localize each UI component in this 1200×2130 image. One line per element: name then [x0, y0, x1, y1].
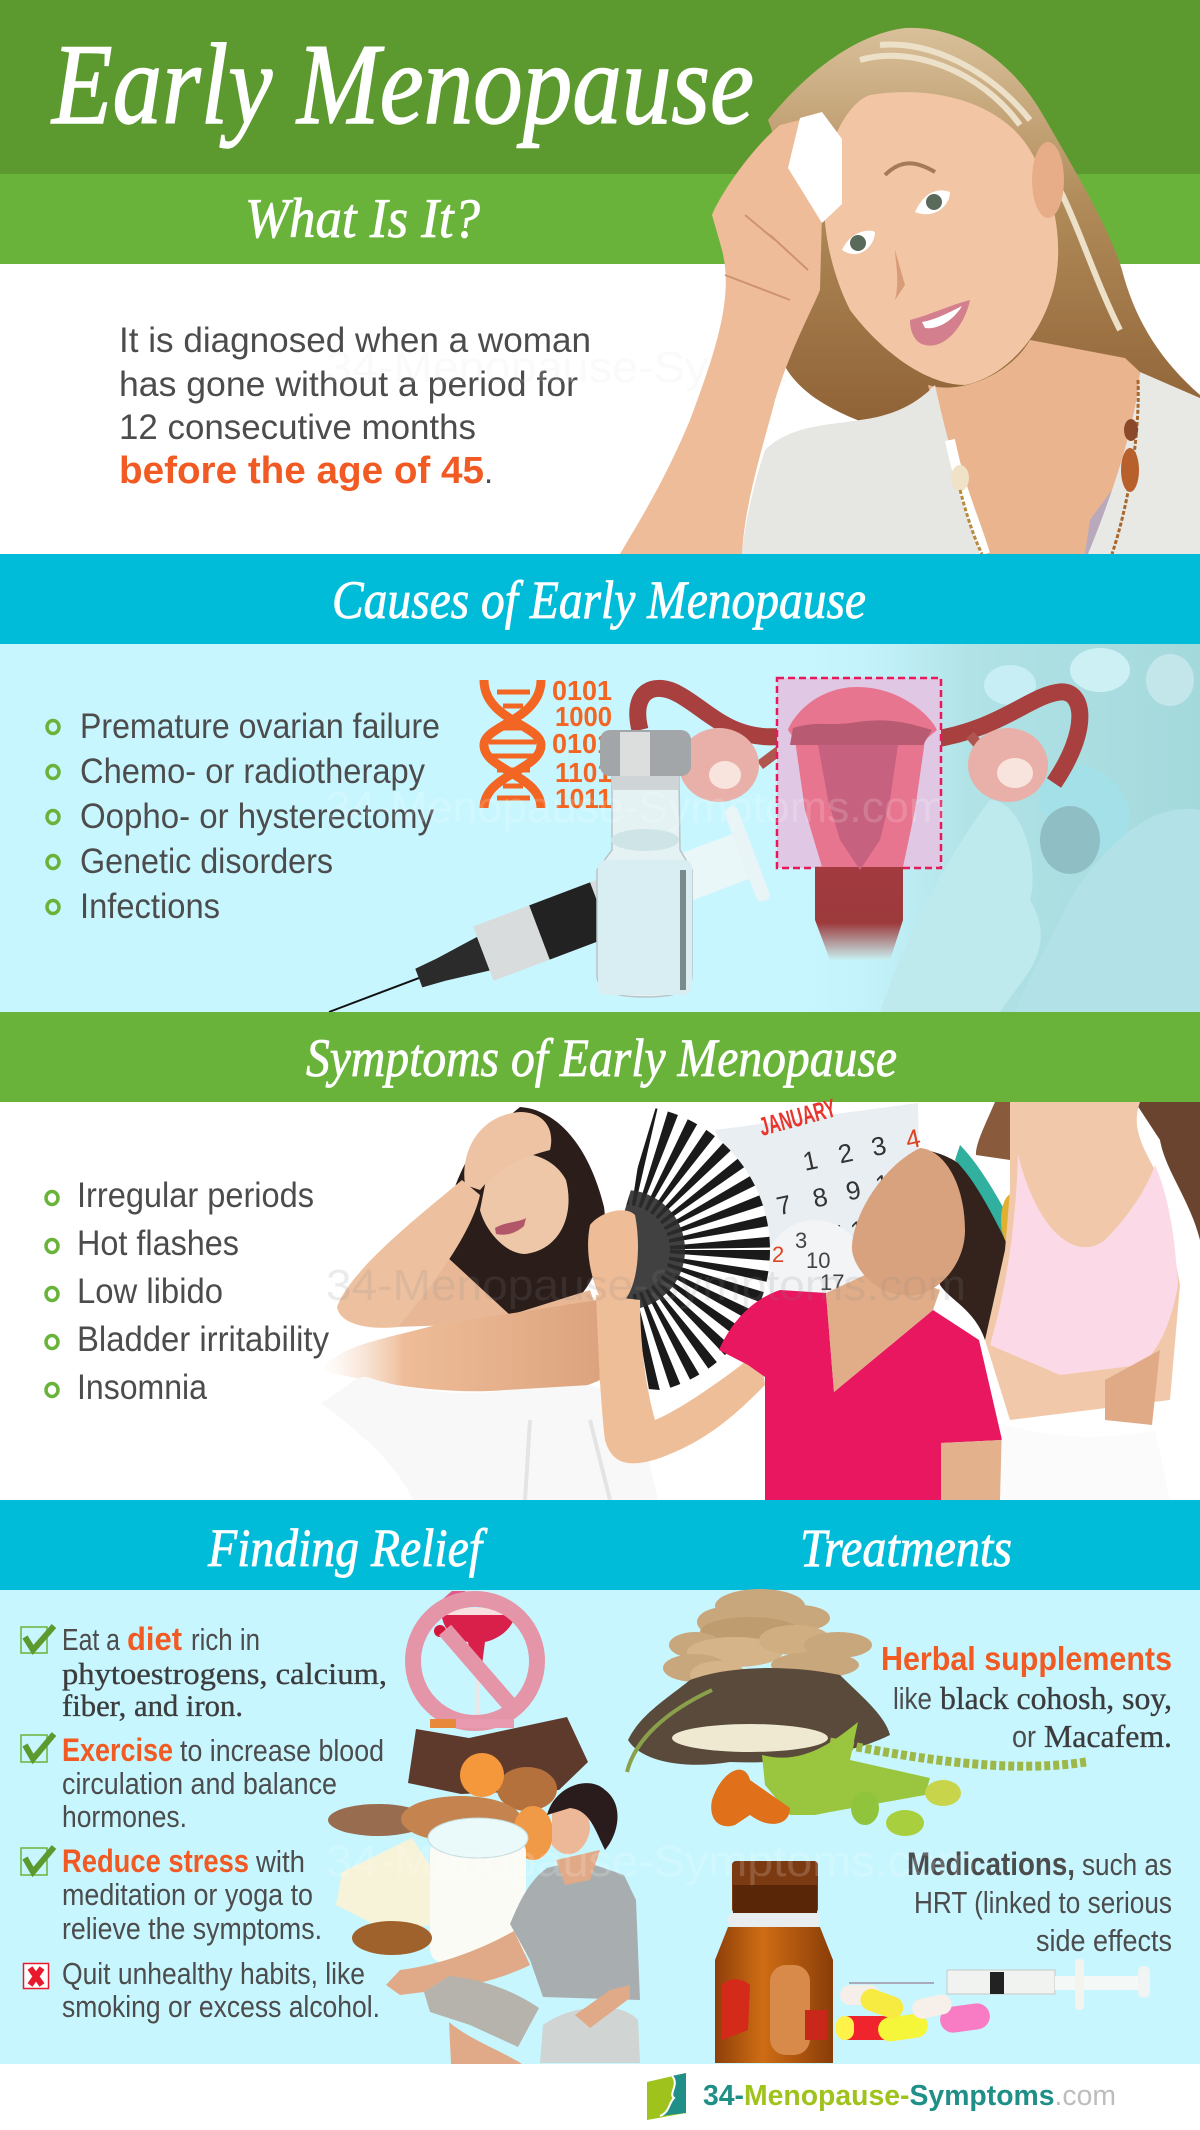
- icon: no alcohol or smoking sign: [413, 1591, 537, 1728]
- text block: definition: 12 consecutive months: [119, 408, 476, 447]
- bullet list item: Low libido: [77, 1272, 223, 1311]
- bullet list item: Bladder irritability: [77, 1320, 329, 1359]
- photo: herbal supplements: [627, 1589, 1086, 1836]
- photo: calendars: 16: [848, 1211, 882, 1246]
- tip: reduce stress: [21, 1843, 322, 1946]
- photo: calendars: 1: [800, 1144, 820, 1177]
- photo: woman with hand on forehead: [321, 1107, 658, 1500]
- icon: DNA helix with binary digits: 1101: [555, 757, 612, 788]
- text block: herbal supplements: Herbal supplements: [881, 1640, 1172, 1677]
- tip: reduce stress: Reduce stress: [62, 1843, 249, 1879]
- bullet list item: Chemo- or radiotherapy: [80, 752, 425, 791]
- bullet list item: Premature ovarian failure: [80, 707, 440, 746]
- list: causes: [47, 707, 440, 926]
- watermark: 34-Menopause-Symptoms.com: [326, 343, 976, 392]
- bullet list item: Oopho- or hysterectomy: [80, 797, 434, 836]
- icon: DNA helix with binary digits: 1000: [555, 701, 612, 732]
- text block: herbal supplements: like: [893, 1681, 932, 1716]
- bullet list item: Hot flashes: [77, 1224, 239, 1263]
- title: Early Menopause: [50, 21, 754, 149]
- photo: syringe: [311, 805, 771, 1059]
- photo: calendars: [715, 1093, 939, 1370]
- list: relief tips: [21, 1621, 387, 2024]
- icon: DNA helix with binary digits: 1011: [555, 783, 612, 814]
- heading: finding relief: Finding Relief: [207, 1518, 488, 1578]
- text block: medications: Medications,: [907, 1846, 1075, 1882]
- watermark: 34-Menopause-Symptoms.com: [326, 783, 946, 832]
- fan: [624, 1108, 770, 1390]
- text block: definition: [119, 321, 591, 492]
- photo: glass vial: [597, 730, 692, 997]
- text block: definition: .: [484, 453, 493, 490]
- panel: symptoms of early menopause: [0, 1012, 1200, 1500]
- tip: quit unhealthy habits: Quit unhealthy habits, like: [62, 1956, 365, 1991]
- tip: diet: rich in: [191, 1622, 260, 1657]
- photo: woman with fan: [588, 1108, 1010, 1500]
- tip: diet: [21, 1621, 387, 1723]
- photo: calendars: 14: [775, 1226, 810, 1262]
- heading: what is it: What Is It?: [245, 188, 480, 250]
- bullet list item: Irregular periods: [77, 1176, 314, 1215]
- photo: calendars: 17: [820, 1270, 844, 1295]
- photo: calendars: JANUARY: [756, 1093, 839, 1142]
- tip: diet: diet: [127, 1621, 182, 1657]
- diagram: uterus and ovaries: [638, 678, 1080, 960]
- photo: calendars: 7: [774, 1189, 794, 1221]
- text block: medications: such as: [1082, 1847, 1172, 1882]
- photo: calendars: 2: [772, 1242, 784, 1267]
- watermark: 34-Menopause-Symptoms.com: [326, 1261, 966, 1310]
- photo: woman with tissue at forehead: [620, 28, 1200, 554]
- bullet list item: Genetic disorders: [80, 842, 333, 881]
- photo: medicine bottle, pills and syringe: [715, 1861, 1150, 2063]
- icon: DNA helix with binary digits: [484, 675, 612, 814]
- photo: calendars: 3: [869, 1130, 889, 1162]
- tip: diet: Eat a: [62, 1622, 121, 1657]
- tip: exercise: to increase blood: [180, 1733, 384, 1768]
- icon: DNA helix with binary digits: 0101: [552, 728, 612, 759]
- panel: causes of early menopause: [0, 554, 1200, 1059]
- panel: finding relief and treatments: [0, 1500, 1200, 2064]
- tip: reduce stress: meditation or yoga to: [62, 1877, 313, 1912]
- tip: quit unhealthy habits: smoking or excess alcohol.: [62, 1989, 380, 2024]
- bullet list item: Insomnia: [77, 1368, 207, 1407]
- photo: woman holding abdomen: [976, 1102, 1200, 1500]
- photo: surgeons background: [780, 644, 1200, 1012]
- icon: DNA helix with binary digits: 0101: [552, 675, 612, 706]
- tip: reduce stress: relieve the symptoms.: [62, 1911, 322, 1946]
- photo: calendars: 8: [810, 1181, 830, 1214]
- tip: exercise: [21, 1732, 384, 1834]
- text block: herbal supplements: black cohosh, soy,: [940, 1680, 1172, 1716]
- text block: herbal supplements: [881, 1640, 1172, 1754]
- heading: causes: Causes of Early Menopause: [332, 570, 866, 630]
- tip: reduce stress: with: [255, 1844, 305, 1879]
- photo: woman meditating: [386, 1783, 640, 2064]
- footer logo: [0, 2064, 1200, 2130]
- tip: exercise: circulation and balance: [62, 1766, 337, 1801]
- tip: exercise: Exercise: [62, 1732, 173, 1768]
- photo: calendars: 2: [835, 1137, 856, 1169]
- bullet list item: Infections: [80, 887, 220, 926]
- text block: herbal supplements: or: [1012, 1719, 1036, 1754]
- tip: diet: fiber, and iron.: [62, 1688, 243, 1723]
- photo: iron and phytoestrogen foods: [328, 1717, 588, 1963]
- photo: calendars: 3: [795, 1228, 807, 1253]
- text block: medications: [907, 1846, 1172, 1958]
- list: symptoms: [46, 1176, 329, 1407]
- text block: medications: side effects: [1036, 1923, 1172, 1958]
- photo: calendars: 9: [843, 1174, 864, 1206]
- photo: calendars: 10: [873, 1165, 907, 1200]
- heading: symptoms: Symptoms of Early Menopause: [306, 1028, 897, 1088]
- text block: definition: It is diagnosed when a woman: [119, 321, 591, 360]
- heading: treatments: Treatments: [800, 1518, 1012, 1578]
- watermark: 34-Menopause-Symptoms.com: [326, 1837, 976, 1886]
- text block: definition: before the age of 45: [119, 450, 484, 492]
- photo: calendars: 4: [903, 1123, 923, 1155]
- panel: what is it: [0, 0, 1200, 554]
- text block: definition: has gone without a period for: [119, 365, 578, 404]
- photo: calendars: 10: [806, 1248, 830, 1273]
- tip: diet: phytoestrogens, calcium,: [62, 1656, 387, 1691]
- tip: quit unhealthy habits: [24, 1956, 380, 2024]
- tip: exercise: hormones.: [62, 1799, 187, 1834]
- photo: calendars: 15: [812, 1219, 847, 1254]
- site name: 34-Menopause-Symptoms.com: [703, 2080, 1116, 2112]
- icon: logo face profile: [647, 2073, 686, 2120]
- text block: herbal supplements: Macafem.: [1044, 1718, 1172, 1754]
